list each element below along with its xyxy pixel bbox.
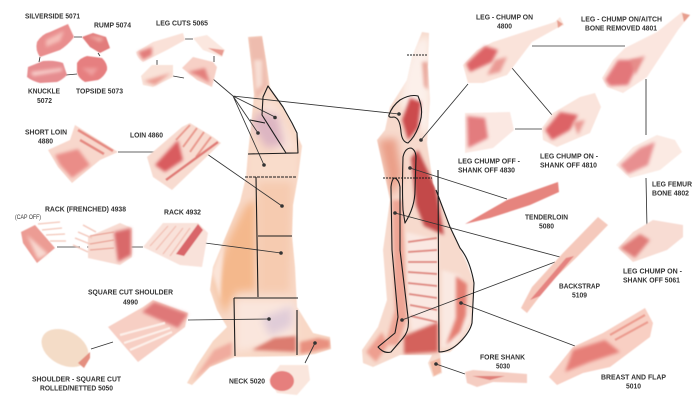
cut: leg chump on — [463, 17, 564, 83]
labels: left side: RUMP 5074 — [94, 20, 132, 30]
labels: right side: LEG CHUMP OFF - — [458, 156, 520, 166]
labels: left side: LOIN 4860 — [130, 130, 163, 140]
labels: right side: LEG CHUMP ON - — [540, 152, 598, 160]
labels: right side: 5030 — [496, 362, 510, 370]
labels: right side: SHANK OFF 4830 — [458, 166, 515, 174]
right lamb carcass — [362, 32, 474, 377]
cut: tenderloin — [465, 182, 559, 224]
cut: leg chump off shank off — [465, 112, 514, 153]
right carcass cut outlines — [378, 55, 474, 352]
cut: leg cuts — [136, 33, 225, 87]
cut: leg chump on shank off — [542, 93, 601, 147]
labels: left side: NECK 5020 — [229, 376, 265, 386]
cut: breast and flap — [549, 308, 653, 385]
cut: leg femur bone — [616, 135, 682, 178]
cut: rack — [143, 223, 208, 267]
labels: left side: 4990 — [123, 298, 138, 306]
labels: right side: BREAST AND FLAP — [601, 372, 666, 382]
cut: loin — [147, 123, 221, 190]
cut: backstrap — [521, 217, 608, 313]
labels: left side: 5072 — [37, 96, 52, 105]
labels: left side: KNUCKLE — [28, 86, 60, 96]
labels: left side: LEG CUTS 5065 — [156, 18, 208, 28]
labels: left side — [15, 12, 265, 392]
labels: left side: SHOULDER - SQUARE CUT — [32, 374, 121, 384]
location dots — [256, 112, 463, 366]
labels: right side: LEG CHUMP ON - — [623, 266, 682, 276]
cut: fore shank — [465, 370, 527, 387]
cut: topside — [77, 56, 107, 82]
labels: left side: SHORT LOIN — [25, 128, 67, 136]
connector lines — [39, 37, 647, 374]
labels: right side: 5080 — [539, 222, 554, 230]
labels: right side: BACKSTRAP — [559, 282, 600, 290]
cut: shank off 5061 — [618, 220, 683, 262]
labels: left side: (CAP OFF) — [15, 215, 41, 221]
cut: leg chump on aitch bone removed — [602, 12, 690, 93]
cut: square cut shoulder — [108, 300, 188, 362]
cut: knuckle — [27, 61, 67, 83]
labels: right side: 5010 — [626, 382, 641, 390]
labels: left side: RACK (FRENCHED) 4938 — [45, 204, 126, 214]
labels: right side: SHANK OFF 4810 — [540, 160, 597, 170]
left lamb carcass — [186, 36, 332, 386]
labels: right side: BONE REMOVED 4801 — [585, 24, 657, 32]
labels: right side: 5109 — [572, 290, 587, 300]
labels: right side: LEG FEMUR — [652, 180, 693, 188]
labels: left side: ROLLED/NETTED 5050 — [40, 384, 113, 392]
labels: left side: RACK 4932 — [164, 208, 201, 216]
labels: right side — [458, 12, 693, 390]
cut: rack frenched cap off — [21, 222, 66, 263]
cut: rack frenched — [73, 223, 132, 265]
labels: left side: SILVERSIDE 5071 — [25, 12, 80, 20]
left carcass cut outlines — [234, 86, 298, 356]
labels: left side: SQUARE CUT SHOULDER — [88, 288, 174, 296]
labels: right side: LEG - CHUMP ON — [476, 12, 533, 22]
labels: left side: TOPSIDE 5073 — [76, 86, 123, 96]
labels: left side: 4880 — [38, 136, 53, 146]
cut: neck — [269, 365, 310, 395]
labels: right side: SHANK OFF 5061 — [623, 276, 680, 284]
labels: right side: LEG - CHUMP ON/AITCH — [581, 14, 662, 24]
labels: right side: FORE SHANK — [480, 352, 526, 362]
labels: right side: 4800 — [497, 22, 512, 30]
labels: right side: TENDERLOIN — [525, 212, 568, 222]
labels: right side: BONE 4802 — [652, 188, 689, 198]
cut: rump — [82, 33, 110, 53]
cut: shoulder rolled netted — [35, 321, 95, 375]
cut: silverside — [36, 24, 74, 57]
cut: short loin — [48, 125, 118, 183]
